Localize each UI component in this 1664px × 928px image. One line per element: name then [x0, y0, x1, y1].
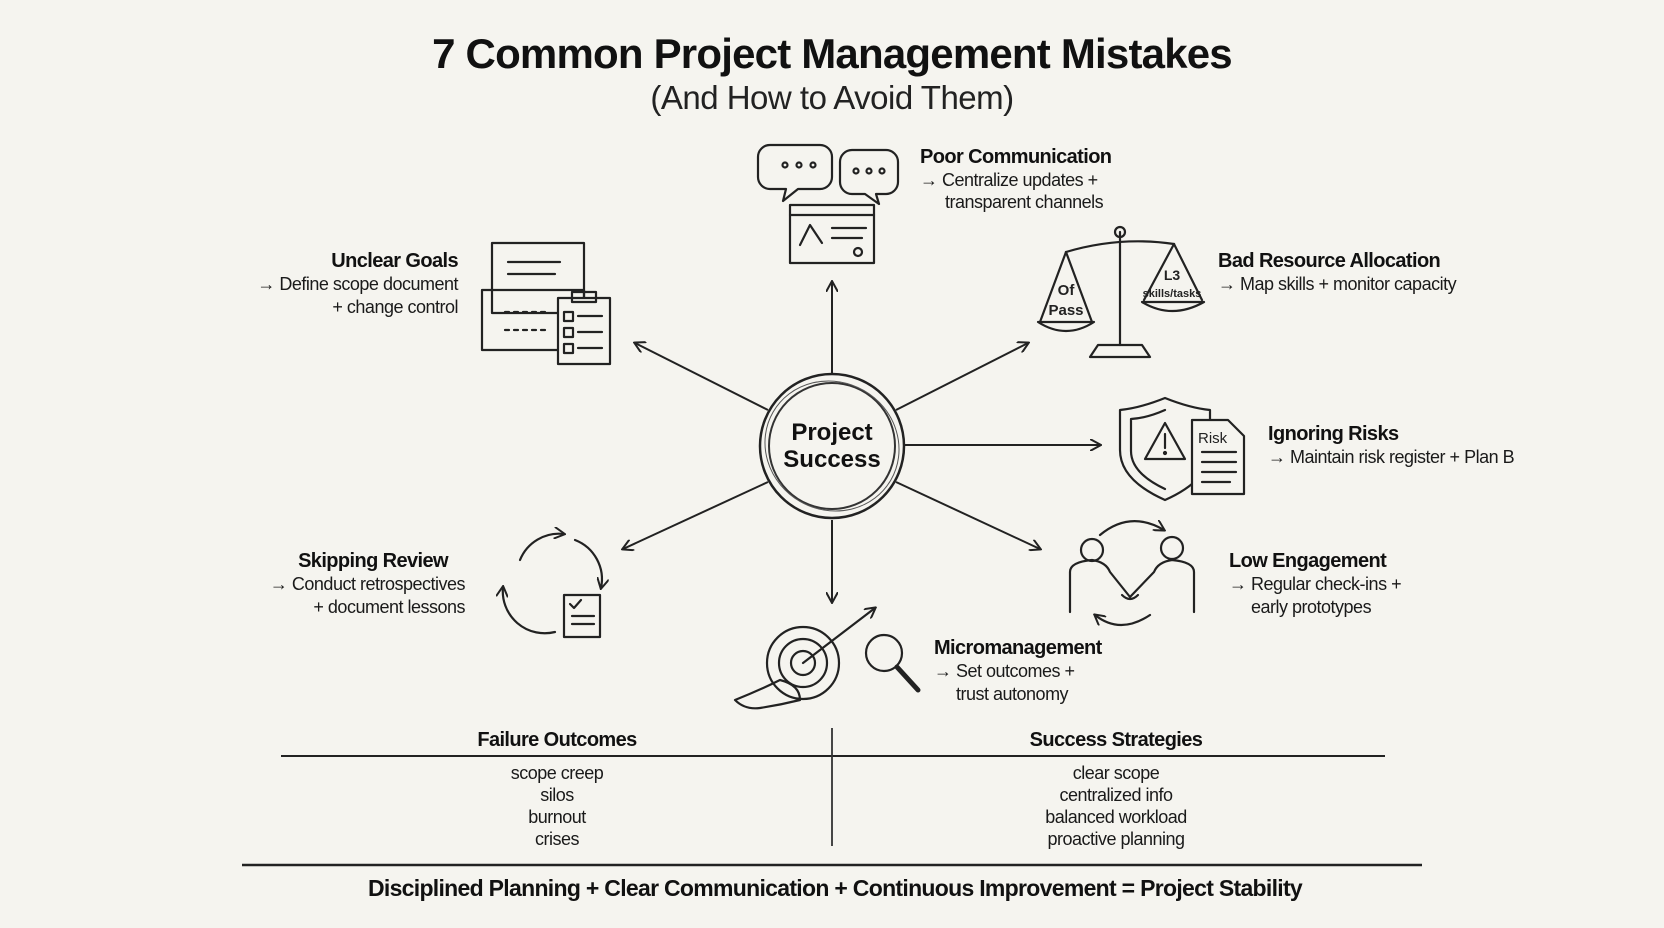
label: Low Engagement: Low Engagement [1229, 550, 1387, 572]
icon: handshake [1070, 521, 1194, 625]
label: Skipping Review [270, 550, 466, 617]
label: Ignoring Risks [1268, 423, 1515, 467]
subtitle: (And How to Avoid Them) [650, 79, 1014, 116]
label: Low Engagement [1229, 550, 1401, 617]
label: Micromanagement: Micromanagement [934, 637, 1103, 659]
icon: shield and risk document [1120, 398, 1244, 500]
label: Poor Communication: → Centralize updates + [920, 170, 1098, 190]
label: Bad Resource Allocation: → Map skills + monitor capacity [1218, 274, 1457, 294]
icon: balance scale [1038, 227, 1204, 357]
label: Micromanagement [934, 637, 1103, 704]
label: Unclear Goals: Unclear Goals [331, 250, 458, 272]
icon: scope documents and clipboard [482, 243, 610, 364]
label: Micromanagement: trust autonomy [956, 684, 1069, 704]
column: Failure Outcomes: burnout [528, 807, 586, 827]
column: Success Strategies: balanced workload [1045, 807, 1187, 827]
center circle: Project Success [741, 357, 923, 535]
label: Poor Communication: transparent channels [945, 192, 1104, 212]
column: Success Strategies: centralized info [1059, 785, 1173, 805]
column: Failure Outcomes [477, 729, 637, 849]
footer equation: Disciplined Planning + Clear Communication + Continuous Improvement = Project Stability [368, 875, 1303, 901]
column: Failure Outcomes: scope creep [511, 763, 604, 783]
icon: balance scale: skills/tasks [1143, 288, 1201, 300]
label: Poor Communication [920, 146, 1111, 212]
arrows [623, 282, 1100, 602]
icon: target and magnifier [735, 608, 918, 708]
icon: balance scale: L3 [1164, 267, 1180, 283]
column: Success Strategies: Success Strategies [1030, 729, 1203, 751]
label: Skipping Review: Skipping Review [298, 550, 449, 572]
column: Success Strategies: clear scope [1073, 763, 1160, 783]
label: Micromanagement: → Set outcomes + [934, 661, 1075, 681]
icon: chat bubbles and browser [758, 145, 898, 263]
title: 7 Common Project Management Mistakes [432, 30, 1232, 77]
label: Unclear Goals: + change control [332, 297, 458, 317]
icon: cycle arrows and checklist [503, 534, 602, 637]
label: Bad Resource Allocation [1218, 250, 1457, 294]
column: Failure Outcomes: silos [540, 785, 574, 805]
label: Ignoring Risks: Ignoring Risks [1268, 423, 1399, 445]
label: Low Engagement: early prototypes [1251, 597, 1372, 617]
icon: shield and risk document: Risk [1198, 430, 1228, 447]
column: Success Strategies [1030, 729, 1203, 849]
label: Bad Resource Allocation: Bad Resource Allocation [1218, 250, 1440, 272]
icon: balance scale: Pass [1048, 302, 1084, 319]
icon: balance scale: Of [1058, 282, 1075, 299]
label: Unclear Goals [257, 250, 458, 317]
column: Success Strategies: proactive planning [1047, 829, 1185, 849]
center circle: Project Success: Project [791, 419, 873, 446]
label: Unclear Goals: → Define scope document [257, 274, 458, 294]
center circle: Project Success: Success [783, 446, 881, 473]
label: Skipping Review: → Conduct retrospectives [270, 574, 465, 594]
label: Low Engagement: → Regular check-ins + [1229, 574, 1401, 594]
column: Failure Outcomes: crises [535, 829, 579, 849]
column: Failure Outcomes: Failure Outcomes [477, 729, 637, 751]
label: Skipping Review: + document lessons [313, 597, 466, 617]
table dividers [281, 755, 1385, 757]
label: Poor Communication: Poor Communication [920, 146, 1111, 168]
label: Ignoring Risks: → Maintain risk register + Plan B [1268, 447, 1515, 467]
